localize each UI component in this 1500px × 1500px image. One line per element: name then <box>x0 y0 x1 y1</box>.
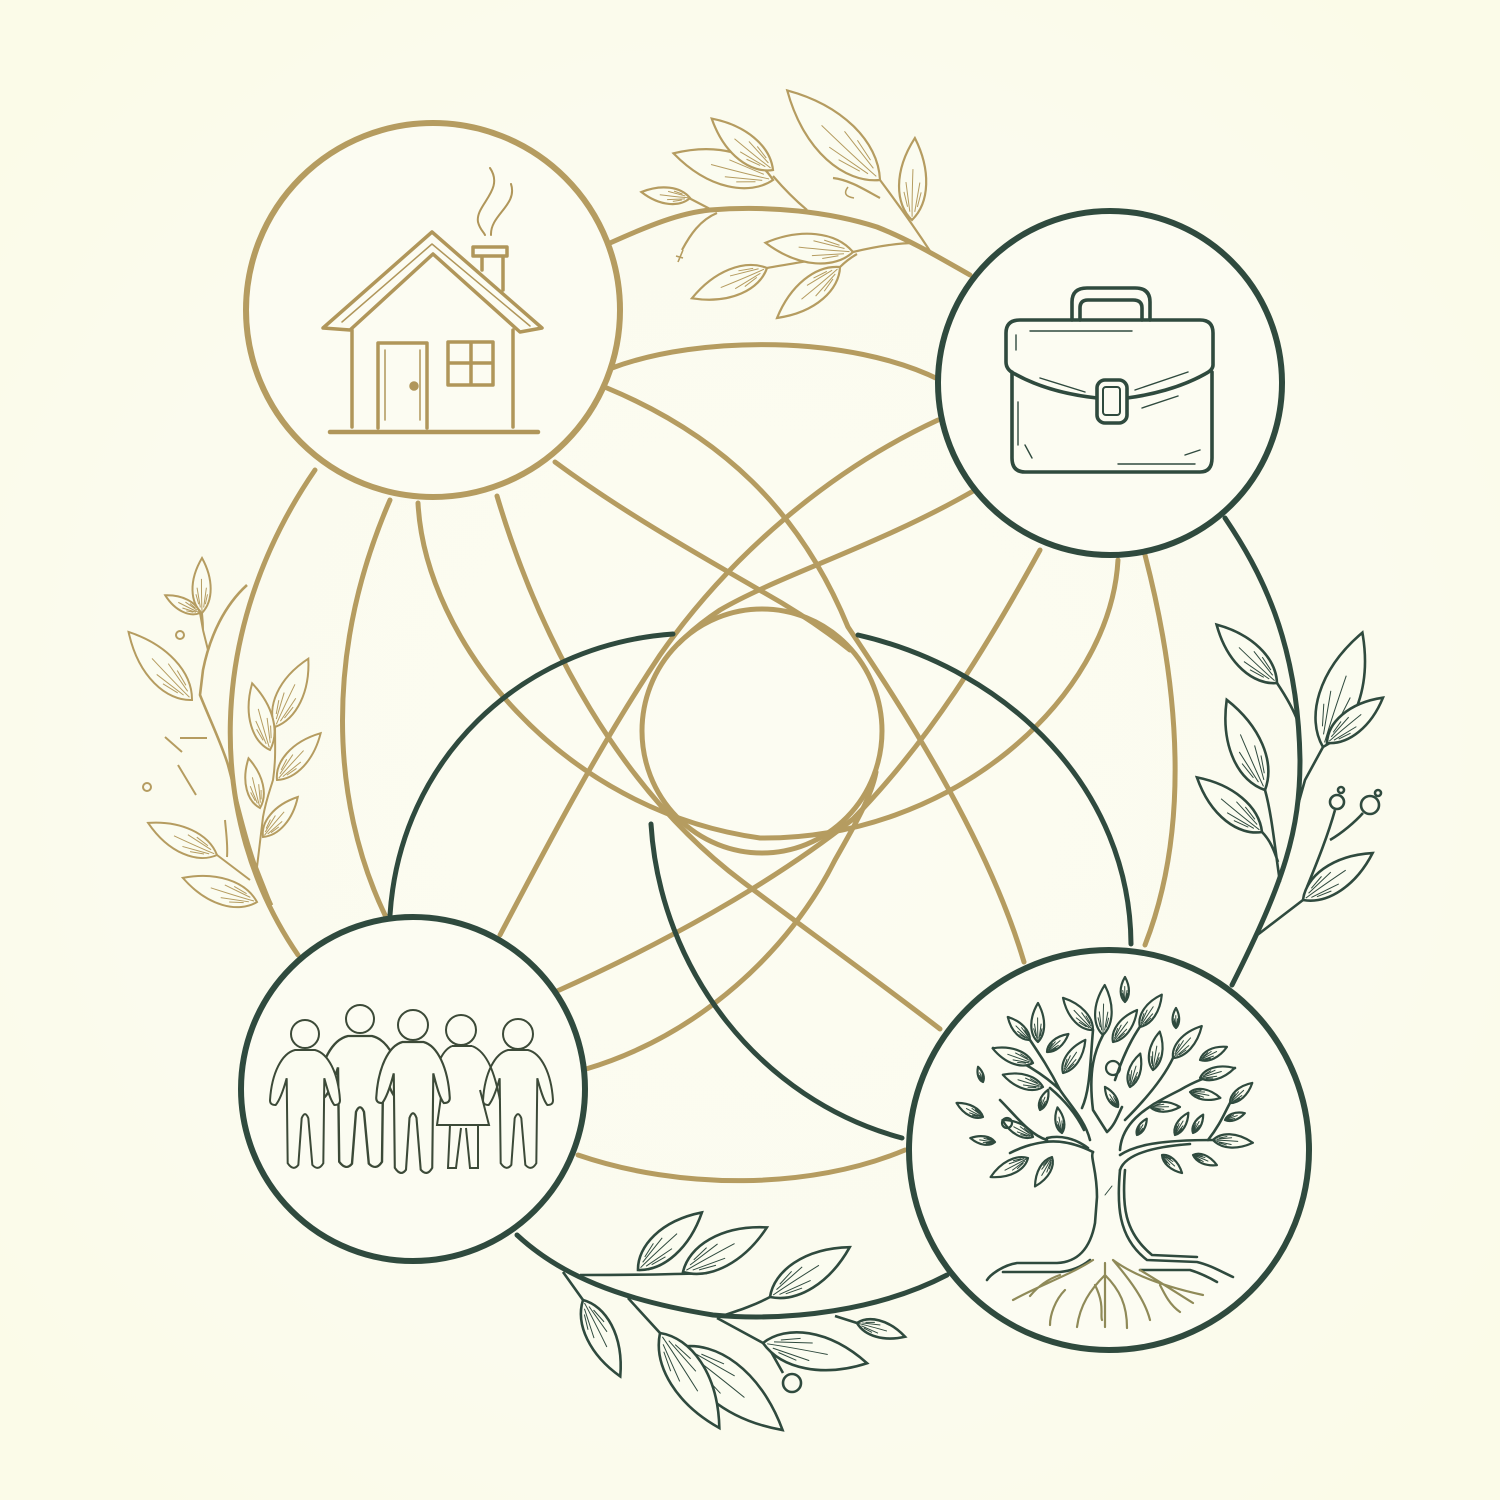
tree leaves <box>954 977 1255 1189</box>
icon: house <box>323 168 542 432</box>
tree trunk and branches <box>987 1000 1235 1282</box>
dark green connecting curves <box>390 518 1300 1317</box>
sprig: left gold leaves <box>117 558 328 915</box>
icon: briefcase <box>1006 288 1213 472</box>
node: community circle <box>241 917 585 1261</box>
sprig: right green leaves <box>1187 615 1390 936</box>
icon: tree <box>954 977 1255 1328</box>
node: home circle <box>246 123 620 497</box>
sprig: top gold leaves <box>640 76 932 329</box>
node: nature circle <box>909 950 1309 1350</box>
icon: group of people <box>270 1005 553 1173</box>
tree roots <box>1013 1260 1203 1328</box>
node: work circle <box>938 211 1282 555</box>
gold connecting curves <box>230 208 1175 1181</box>
sprig: bottom green leaves <box>563 1201 907 1446</box>
